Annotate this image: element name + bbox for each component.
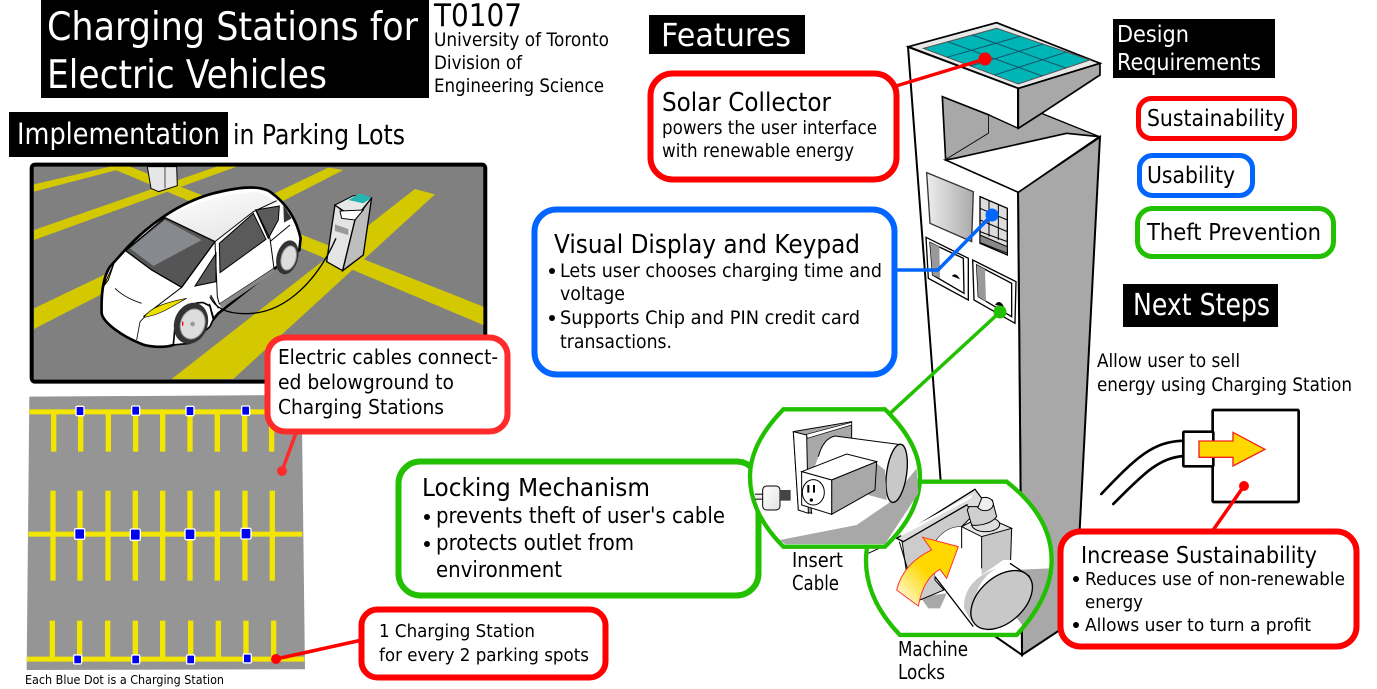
panel: car at charging station illustration: [32, 165, 485, 382]
charging station tower illustration: [908, 23, 1100, 655]
legend: theft prevention: [1138, 208, 1334, 256]
legend: sustainability: [1138, 98, 1294, 138]
callout: electric cables: [268, 338, 508, 476]
callout: station ratio: 1 Charging Station: [379, 621, 535, 642]
heading: design requirements: Requirements: [1117, 50, 1261, 76]
icon: plug selling energy to station: [1101, 410, 1299, 504]
callout: visual display and keypad: Supports Chip and PIN credit card: [560, 307, 860, 329]
callout: increase sustainability: Increase Sustainability: [1081, 543, 1317, 569]
callout: solar collector: with renewable energy: [662, 140, 854, 162]
callout: station ratio: [271, 610, 606, 678]
callout: station ratio: for every 2 parking spots: [379, 645, 589, 666]
parking lot plan with charging stations: [27, 395, 305, 670]
callout: increase sustainability: Allows user to turn a profit: [1085, 615, 1311, 636]
callout: visual display and keypad: Visual Display and Keypad: [554, 230, 860, 260]
team and affiliation: [433, 0, 609, 97]
label: insert cable: [792, 548, 843, 595]
callout: increase sustainability: [1060, 481, 1356, 646]
title: Charging Stations for: [47, 5, 419, 50]
title: Electric Vehicles: [47, 53, 327, 98]
callout: electric cables: ed belowground to: [278, 370, 454, 394]
label: machine locks: [898, 637, 968, 684]
caption: blue dots: Each Blue Dot is a Charging Station: [25, 672, 224, 687]
legend: sustainability: Sustainability: [1147, 106, 1285, 132]
callout: electric cables: Electric cables connect-: [278, 345, 498, 369]
callout: visual display and keypad: Lets user chooses charging time and: [560, 260, 882, 282]
label: machine locks: Locks: [898, 660, 945, 684]
heading: implementation in parking lots: Implementation: [17, 117, 220, 151]
title: [41, 0, 429, 98]
callout: increase sustainability: energy: [1085, 592, 1143, 613]
team and affiliation: University of Toronto: [434, 29, 609, 51]
text: sell energy: [1097, 350, 1352, 396]
label: insert cable: Cable: [792, 571, 839, 595]
heading: next steps: Next Steps: [1133, 288, 1270, 323]
inset: machine locks: [866, 482, 1052, 641]
text: sell energy: Allow user to sell: [1097, 350, 1240, 372]
inset: insert cable: [750, 409, 920, 547]
label: insert cable: Insert: [792, 548, 843, 572]
legend: theft prevention: Theft Prevention: [1146, 220, 1321, 246]
callout: locking mechanism: environment: [436, 558, 562, 583]
callout: locking mechanism: protects outlet from: [436, 531, 634, 556]
callout: increase sustainability: Reduces use of non-renewable: [1085, 569, 1345, 590]
callout: visual display and keypad: [534, 208, 998, 374]
heading: features: Features: [661, 16, 791, 54]
heading: implementation in parking lots: in Parking Lots: [233, 118, 405, 151]
heading: implementation in parking lots: [9, 112, 405, 157]
callout: solar collector: Solar Collector: [662, 88, 831, 118]
callout: electric cables: Charging Stations: [278, 395, 444, 419]
callout: locking mechanism: [398, 306, 1006, 596]
label: machine locks: Machine: [898, 637, 968, 661]
team and affiliation: Division of: [434, 52, 523, 74]
callout: solar collector: powers the user interface: [662, 117, 877, 139]
callout: locking mechanism: prevents theft of user's cable: [436, 504, 725, 529]
heading: next steps: [1123, 284, 1278, 327]
callout: visual display and keypad: voltage: [560, 283, 625, 305]
heading: design requirements: Design: [1117, 22, 1189, 48]
legend: usability: Usability: [1147, 163, 1235, 189]
callout: locking mechanism: Locking Mechanism: [422, 473, 650, 502]
callout: visual display and keypad: transactions.: [560, 331, 672, 353]
team and affiliation: Engineering Science: [434, 75, 604, 97]
legend: usability: [1140, 156, 1252, 196]
heading: design requirements: [1113, 19, 1275, 78]
callout: solar collector: [650, 52, 992, 180]
